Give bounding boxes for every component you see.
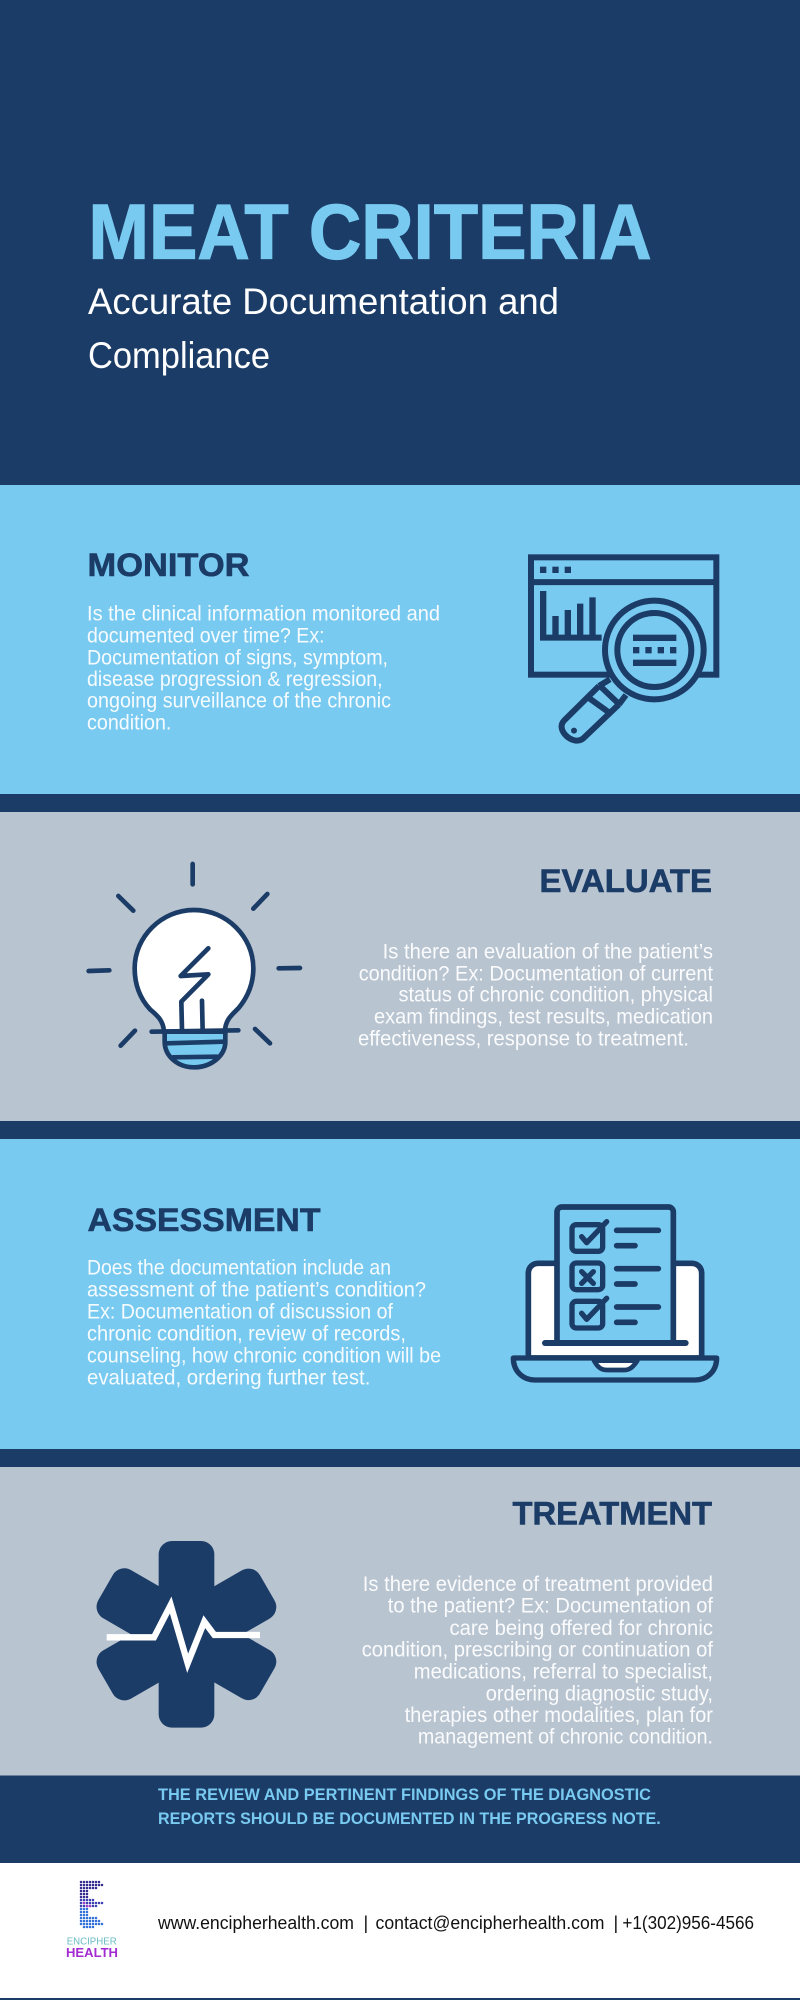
subtitle: Accurate Documentation and — [88, 281, 559, 322]
panel: monitor — [0, 485, 800, 794]
panel: assessment — [0, 1139, 800, 1449]
callout: progress note reminder: THE REVIEW AND PERTINENT FINDINGS OF THE DIAGNOSTIC — [158, 1785, 651, 1804]
text block: monitor description: documented over time? Ex: — [87, 624, 324, 648]
text block: monitor description: Is the clinical information monitored and — [87, 603, 440, 626]
callout: progress note reminder — [158, 1785, 661, 1828]
text block: evaluate description — [358, 940, 713, 1050]
text block: assessment description: evaluated, ordering further test. — [87, 1367, 370, 1390]
subtitle — [88, 281, 559, 376]
contact details: www.encipherhealth.com — [157, 1913, 354, 1933]
contact details — [157, 1913, 754, 1933]
title: MEAT CRITERIA — [88, 188, 652, 276]
text block: treatment description: management of chronic condition. — [418, 1726, 713, 1749]
logo: Encipher Health: ENCIPHER — [67, 1936, 117, 1948]
panel: treatment — [0, 1467, 800, 1776]
text block: monitor description: disease progression & regression, — [87, 668, 383, 691]
icon: checklist on laptop — [513, 1207, 717, 1380]
text block: monitor description: condition. — [87, 712, 171, 735]
text block: evaluate description: exam findings, test results, medication — [374, 1006, 713, 1028]
text block: treatment description: medications, referral to specialist, — [414, 1661, 713, 1684]
contact details: contact@encipherhealth.com — [376, 1913, 604, 1933]
icon: light bulb — [89, 864, 300, 1067]
text block: treatment description: to the patient? Ex: Documentation of — [388, 1595, 713, 1618]
text block: evaluate description: status of chronic condition, physical — [398, 984, 713, 1006]
text block: treatment description: therapies other modalities, plan for — [405, 1704, 713, 1727]
text block: assessment description: chronic condition, review of records, — [87, 1323, 406, 1346]
heading: evaluate: EVALUATE — [540, 863, 712, 899]
text block: treatment description: care being offered for chronic — [450, 1617, 713, 1640]
text block: monitor description: Documentation of signs, symptom, — [87, 646, 388, 670]
icon: browser window and magnifying glass — [531, 557, 716, 741]
text block: assessment description: counseling, how chronic condition will be — [87, 1345, 441, 1368]
panel: footer — [0, 1863, 800, 1998]
heading: monitor: MONITOR — [88, 547, 250, 583]
text block: treatment description — [362, 1573, 713, 1749]
text block: treatment description: Is there evidence of treatment provided — [363, 1573, 713, 1596]
text block: treatment description: condition, prescribing or continuation of — [362, 1639, 713, 1662]
subtitle: Compliance — [88, 335, 270, 376]
text block: evaluate description: Is there an evaluation of the patient’s — [383, 940, 713, 963]
panel: header — [0, 0, 800, 485]
logo: Encipher Health: HEALTH — [66, 1945, 118, 1960]
panel: evaluate — [0, 812, 800, 1121]
logo: Encipher Health — [66, 1882, 118, 1960]
text block: treatment description: ordering diagnostic study, — [486, 1682, 713, 1705]
contact details: | — [614, 1913, 618, 1933]
text block: monitor description — [87, 603, 440, 735]
callout: progress note reminder: REPORTS SHOULD BE DOCUMENTED IN THE PROGRESS NOTE. — [158, 1809, 661, 1828]
text block: assessment description: assessment of the patient’s condition? — [87, 1279, 426, 1302]
text block: evaluate description: condition? Ex: Documentation of current — [359, 962, 713, 985]
contact details: | — [364, 1913, 368, 1933]
text block: assessment description: Ex: Documentation of discussion of — [87, 1301, 393, 1324]
text block: assessment description: Does the documentation include an — [87, 1257, 391, 1280]
text block: monitor description: ongoing surveillance of the chronic — [87, 690, 391, 713]
text block: evaluate description: effectiveness, response to treatment. — [358, 1027, 689, 1050]
text block: assessment description — [87, 1257, 441, 1390]
contact details: +1(302)956-4566 — [622, 1913, 754, 1933]
heading: treatment: TREATMENT — [512, 1496, 712, 1532]
heading: assessment: ASSESSMENT — [88, 1202, 321, 1238]
icon: star of life with heartbeat — [92, 1541, 281, 1728]
